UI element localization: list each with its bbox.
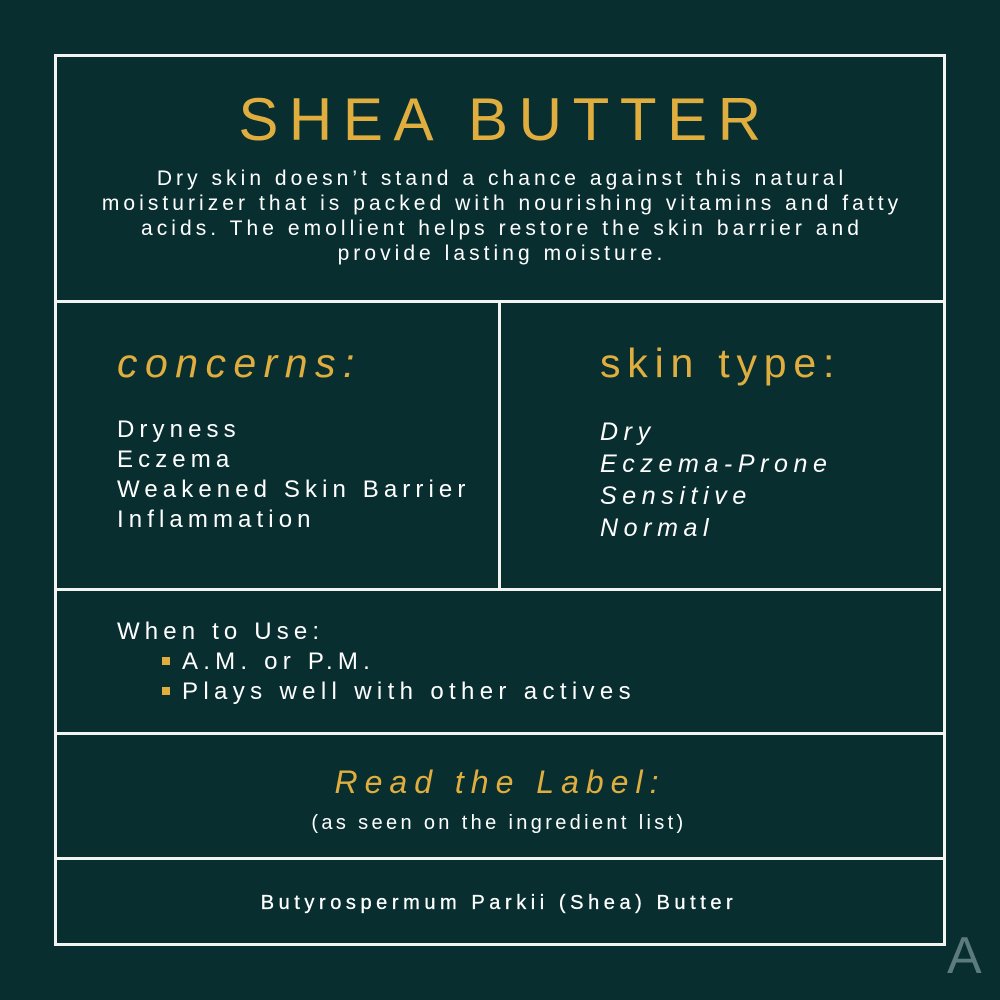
concerns list [117, 416, 470, 533]
skin type heading: skin type: [600, 340, 841, 386]
bullet icon [162, 687, 170, 695]
concerns list: Dryness [117, 416, 241, 443]
read the label heading: Read the Label: [335, 764, 665, 800]
watermark logo: A [947, 927, 982, 985]
bullet icon [162, 657, 170, 665]
skin type list: Eczema-Prone [600, 450, 833, 478]
concerns list: Eczema [117, 446, 234, 473]
concerns list: Inflammation [117, 506, 316, 533]
intro text block: provide lasting moisture. [338, 242, 666, 265]
title: SHEA BUTTER [238, 86, 772, 153]
panel: when to use [117, 618, 636, 705]
intro text block: Dry skin doesn’t stand a chance against this natural [157, 167, 847, 190]
skin type list: Dry [600, 418, 656, 446]
read the label subtext: (as seen on the ingredient list) [311, 812, 687, 834]
ingredient name: Butyrospermum Parkii (Shea) Butter [261, 892, 737, 914]
skin type list: Sensitive [600, 482, 752, 510]
when to use heading: When to Use: [117, 618, 324, 645]
bullet text: Plays well with other actives [182, 678, 636, 705]
concerns list: Weakened Skin Barrier [117, 476, 470, 503]
panel: skin type [600, 340, 841, 542]
skin type list: Normal [600, 514, 714, 542]
concerns heading: concerns: [117, 340, 362, 386]
skin type list [600, 418, 833, 542]
bullet text: A.M. or P.M. [182, 648, 375, 675]
intro text block: acids. The emollient helps restore the skin barrier and [141, 217, 863, 240]
intro text block: moisturizer that is packed with nourishing vitamins and fatty [102, 192, 902, 215]
panel: concerns [117, 340, 470, 533]
intro text block [102, 167, 902, 265]
